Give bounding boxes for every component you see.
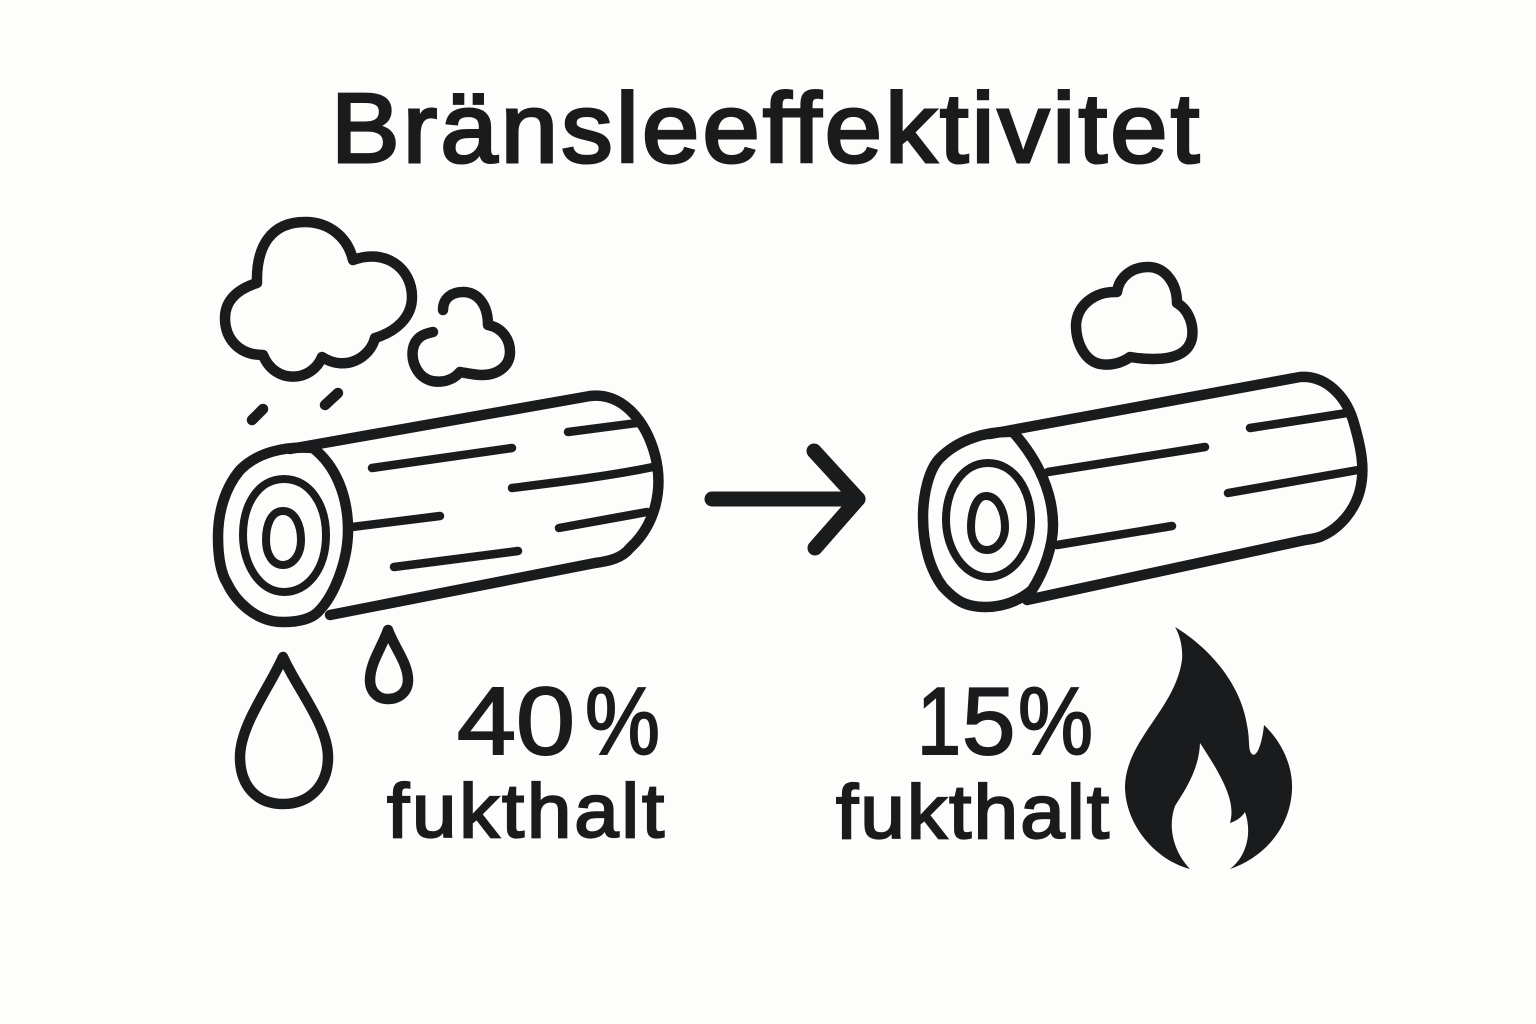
icon: large water drop [240,657,328,804]
icon: flame [1125,627,1292,869]
stat: 15% moisture [836,668,1109,855]
stat: 15% moisture: % [1018,668,1093,775]
log growth ring [243,479,326,592]
icon: steam cloud [1076,267,1192,365]
icon: small cloud [412,292,510,382]
stat: 40% moisture [387,668,665,854]
log body [290,396,658,615]
title: Bränsleeffektivitet [331,74,1199,183]
log body [990,377,1362,600]
stat: 15% moisture: fukthalt [836,769,1109,855]
arrow [712,451,858,548]
log core [266,511,301,565]
icon: wet log [218,396,658,622]
icon: rain marks [252,393,338,420]
icon: large cloud [225,222,412,377]
log core [971,496,1005,550]
stat: 40% moisture: % [585,668,660,775]
log end [923,432,1053,607]
icon: small water drop [370,630,408,699]
bark lines [352,423,653,567]
icon: dry log [923,377,1362,607]
stat: 15% moisture: 1 [917,668,961,775]
stat: 15% moisture: 5 [962,668,1015,775]
stat: 40% moisture: fukthalt [387,768,665,854]
stat: 40% moisture: 40 [457,668,575,775]
log growth ring [946,463,1031,577]
log end [218,448,348,622]
bark lines [1048,413,1358,545]
